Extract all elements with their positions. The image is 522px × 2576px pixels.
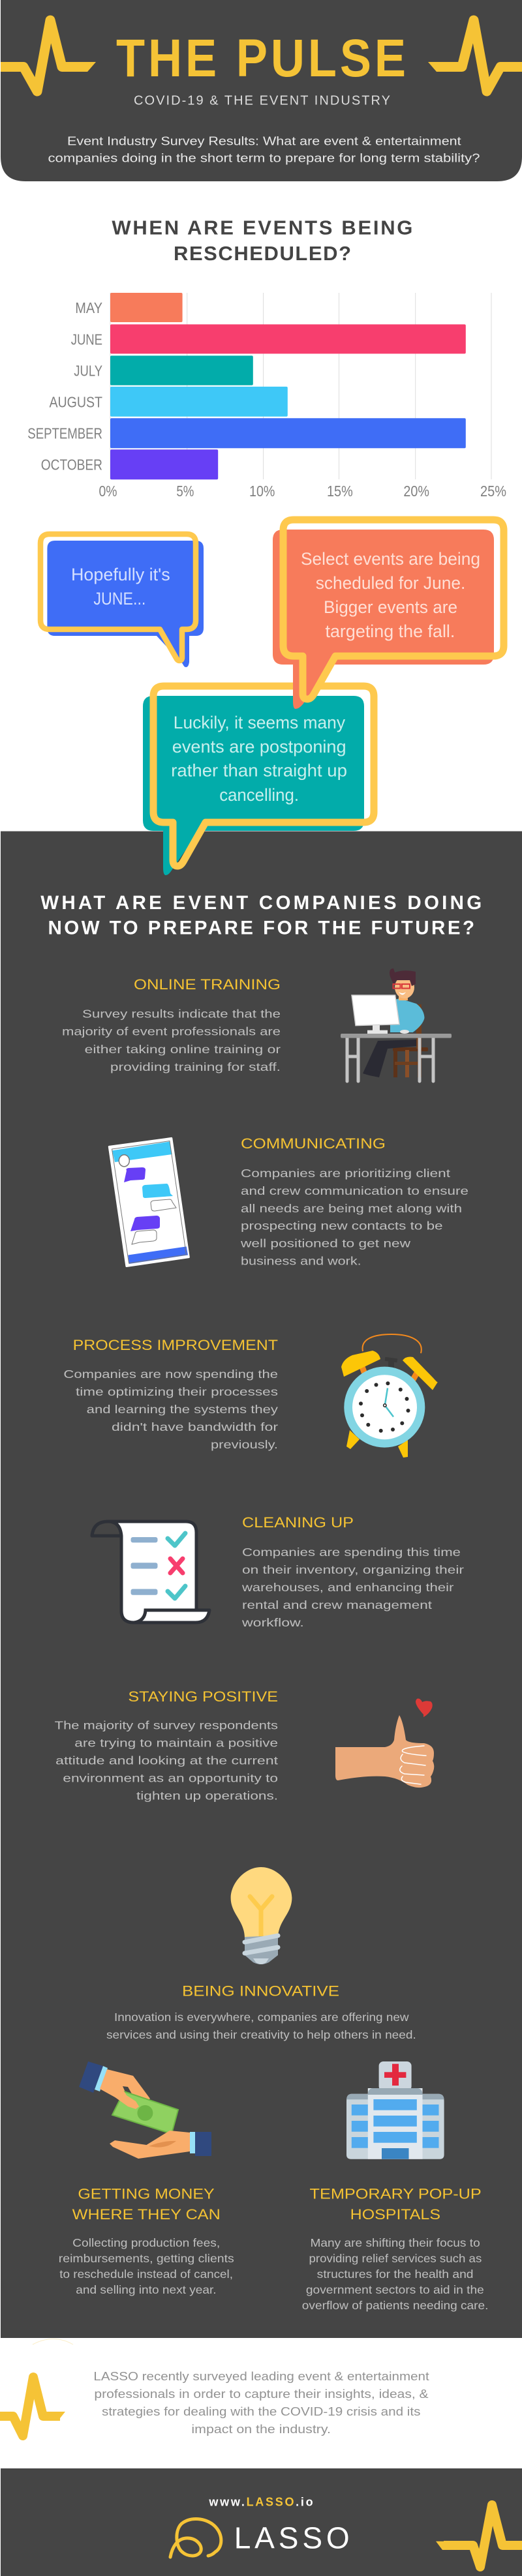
text: about the survey: professionals in order to capture their insights, ideas, & [94, 2388, 429, 2401]
callout: luckily events are postponing: cancelling. [219, 785, 299, 805]
callout: select events scheduled for June: Select events are being [301, 549, 480, 569]
month labels: AUGUST [50, 394, 102, 411]
text: online training: Survey results indicate that the [82, 1008, 281, 1021]
section: staying positive [55, 1688, 434, 1803]
icon: hospital building [346, 2061, 444, 2159]
text: about the survey: strategies for dealing with the COVID-19 crisis and its [102, 2405, 420, 2418]
icon: footer right pulse line [436, 2505, 522, 2567]
heading: when are events being rescheduled: RESCHEDULED? [174, 242, 351, 265]
heading: when are events being rescheduled: WHEN ARE EVENTS BEING [112, 217, 412, 239]
text: cleaning up: workflow. [241, 1616, 304, 1629]
percent axis labels: 15% [327, 483, 353, 500]
text: communicating: business and work. [241, 1255, 361, 1268]
callout: select events scheduled for June: Bigger events are [324, 597, 457, 617]
section: communicating [109, 1135, 468, 1268]
heading: process improvement: PROCESS IMPROVEMENT [73, 1337, 278, 1353]
heading: being innovative: BEING INNOVATIVE [182, 1983, 339, 1999]
percent axis labels: 20% [403, 483, 429, 500]
section: process improvement [63, 1334, 438, 1458]
percent axis labels [99, 483, 506, 500]
icon: right pulse line [428, 20, 522, 91]
heading: getting money where they can: GETTING MONEY [78, 2186, 215, 2202]
icon: left pulse line [1, 20, 96, 91]
text: staying positive: are trying to maintain a positive [74, 1737, 278, 1750]
callout: luckily events are postponing: events are postponing [172, 737, 346, 756]
heading: what are event companies doing: NOW TO PREPARE FOR THE FUTURE? [48, 918, 474, 939]
text: staying positive: The majority of survey respondents [55, 1719, 278, 1732]
text: getting money: and selling into next year. [76, 2283, 217, 2296]
intro text [48, 134, 480, 164]
month labels: JUNE [71, 331, 102, 348]
text: temporary hospitals: providing relief services such as [309, 2252, 482, 2265]
text: getting money [59, 2236, 234, 2296]
icon: footer left pulse line [0, 2377, 65, 2436]
text: communicating: prospecting new contacts to be [241, 1220, 443, 1233]
section: online training [62, 968, 452, 1081]
heading: when are events being rescheduled [112, 217, 412, 265]
section: temporary hospitals [302, 2061, 488, 2312]
text: temporary hospitals: structures for the health and [317, 2268, 474, 2281]
month labels: MAY [75, 299, 102, 316]
text: cleaning up: rental and crew management [242, 1598, 432, 1611]
icon: hands exchanging money [79, 2061, 211, 2159]
section: being innovative [106, 1867, 416, 2041]
month labels [27, 299, 102, 473]
text: staying positive: attitude and looking at the current [55, 1754, 278, 1767]
heading: online training: ONLINE TRAINING [134, 976, 281, 993]
text: staying positive [55, 1719, 278, 1803]
text: about the survey: impact on the industry. [191, 2423, 331, 2436]
heading: what are event companies doing [40, 892, 482, 939]
text: process improvement: and learning the systems they [87, 1403, 278, 1416]
text: getting money: Collecting production fees, [72, 2236, 220, 2249]
callout: hopefully it's June [40, 534, 204, 667]
text: process improvement: didn't have bandwidth for [112, 1420, 278, 1433]
heading: getting money where they can [72, 2186, 221, 2223]
text: online training [62, 1008, 281, 1073]
text: temporary hospitals [302, 2236, 488, 2312]
text: about the survey: LASSO recently surveyed leading event & entertainment [93, 2370, 429, 2383]
bar: September [110, 418, 466, 448]
icon: phone with chat bubbles [109, 1138, 189, 1266]
bar: June [110, 324, 466, 353]
bar: August [110, 387, 288, 417]
heading: communicating: COMMUNICATING [241, 1135, 386, 1152]
text: online training: majority of event professionals are [62, 1025, 281, 1038]
text: being innovative: Innovation is everywhere, companies are offering new [114, 2011, 409, 2024]
panel: about the survey [0, 2339, 429, 2436]
text: process improvement: Companies are now spending the [63, 1368, 278, 1381]
text: staying positive: tighten up operations. [136, 1790, 278, 1803]
text: process improvement: previously. [211, 1438, 278, 1451]
subtitle: COVID-19 & THE EVENT INDUSTRY [134, 94, 390, 108]
callout: hopefully it's June: Hopefully it's [71, 565, 170, 584]
bar: October [110, 449, 218, 479]
text: process improvement: time optimizing their processes [76, 1385, 278, 1398]
month labels: OCTOBER [41, 456, 102, 473]
text: cleaning up: warehouses, and enhancing their [241, 1581, 454, 1594]
percent axis labels: 0% [99, 483, 117, 500]
callout: select events scheduled for June [273, 520, 504, 709]
heading: temporary pop-up hospitals [309, 2186, 482, 2223]
text: communicating: all needs are being met along with [241, 1202, 462, 1215]
text: temporary hospitals: Many are shifting their focus to [311, 2236, 480, 2249]
bar chart [27, 293, 506, 500]
text: getting money: to reschedule instead of cancel, [59, 2268, 233, 2281]
percent axis labels: 10% [249, 483, 275, 500]
callout: select events scheduled for June: targeting the fall. [325, 622, 455, 641]
text: temporary hospitals: overflow of patients needing care. [302, 2299, 488, 2312]
heading: staying positive: STAYING POSITIVE [128, 1688, 278, 1705]
bar: July [110, 355, 253, 385]
heading: temporary pop-up hospitals: HOSPITALS [350, 2206, 440, 2223]
title: THE PULSE [116, 29, 406, 88]
text: staying positive: environment as an opportunity to [63, 1772, 278, 1785]
text: communicating: Companies are prioritizing client [241, 1167, 450, 1180]
heading: getting money where they can: WHERE THEY CAN [72, 2206, 221, 2223]
text: cleaning up: Companies are spending this time [242, 1546, 461, 1559]
callout: luckily events are postponing [143, 686, 374, 875]
bar: May [110, 293, 183, 322]
callout: select events scheduled for June: scheduled for June. [316, 573, 465, 593]
text: getting money: reimbursements, getting clients [59, 2252, 234, 2265]
callout: luckily events are postponing: Luckily, it seems many [174, 713, 345, 732]
intro text: Event Industry Survey Results: What are event & entertainment [67, 134, 461, 147]
icon: alarm clock [341, 1334, 438, 1458]
icon: light bulb [231, 1867, 292, 1964]
icon: person at computer [341, 968, 452, 1081]
percent axis labels: 25% [480, 483, 506, 500]
panel: footer [1, 2468, 522, 2576]
text: communicating [240, 1167, 468, 1268]
icon: thumbs up with heart [335, 1698, 434, 1788]
icon: checklist scroll [92, 1521, 209, 1623]
section: getting money [59, 2061, 234, 2296]
text: temporary hospitals: government sectors to aid in the [306, 2283, 484, 2296]
logo wordmark: LASSO [234, 2521, 350, 2555]
text: online training: either taking online training or [85, 1043, 281, 1056]
callout: luckily events are postponing: rather than straight up [171, 761, 347, 781]
panel: header [1, 0, 522, 181]
text: cleaning up [241, 1546, 464, 1629]
month labels: SEPTEMBER [27, 425, 102, 442]
heading: cleaning up: CLEANING UP [242, 1514, 354, 1531]
text: being innovative [106, 2011, 416, 2041]
icon: lasso logo mark [170, 2519, 221, 2557]
website link: www.LASSO.io [208, 2495, 313, 2508]
text: about the survey [93, 2370, 429, 2436]
text: process improvement [63, 1368, 278, 1451]
intro text: companies doing in the short term to prepare for long term stability? [48, 151, 480, 164]
text: cleaning up: on their inventory, organizing their [242, 1563, 464, 1576]
text: communicating: well positioned to get new [240, 1237, 410, 1250]
percent axis labels: 5% [176, 483, 194, 500]
panel: what event companies are doing [1, 831, 522, 2338]
section: cleaning up [92, 1514, 464, 1629]
callout: hopefully it's June: JUNE... [93, 589, 146, 608]
heading: temporary pop-up hospitals: TEMPORARY POP-UP [309, 2186, 482, 2202]
month labels: JULY [74, 363, 102, 380]
heading: what are event companies doing: WHAT ARE EVENT COMPANIES DOING [40, 892, 482, 914]
text: being innovative: services and using their creativity to help others in need. [106, 2028, 416, 2041]
text: communicating: and crew communication to ensure [241, 1184, 468, 1197]
text: online training: providing training for staff. [110, 1060, 281, 1073]
